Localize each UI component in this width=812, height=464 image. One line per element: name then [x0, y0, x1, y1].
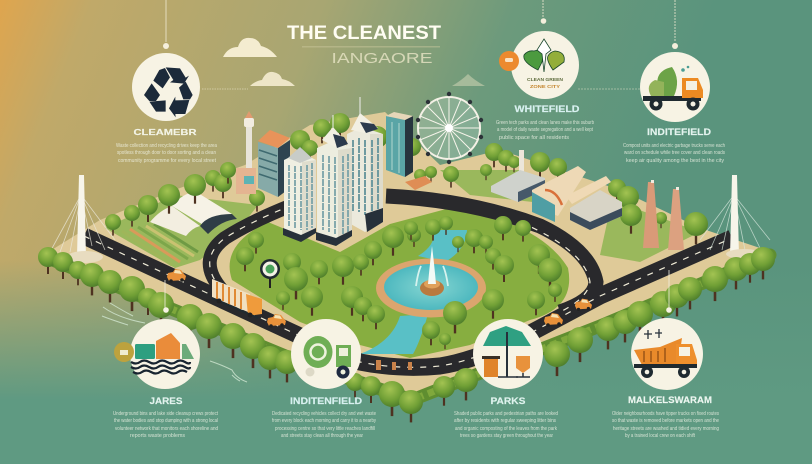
description: by a trained local crew on each shift — [625, 433, 696, 439]
description: spotless through door to door sorting and a clean — [117, 150, 216, 156]
tower B — [316, 115, 352, 246]
icon: leaf truck — [643, 66, 703, 110]
lawn trees — [236, 216, 562, 349]
badge caption: CLEAN GREEN — [527, 77, 563, 82]
description: the water bodies and stop dumping with a strong local — [114, 418, 218, 424]
panel: inditenfield badge — [272, 319, 376, 439]
title — [287, 22, 441, 67]
panel: indite field truck badge — [623, 52, 725, 164]
ferris wheel — [416, 92, 483, 164]
title: IANGAORE — [332, 50, 432, 67]
island ground — [42, 112, 772, 400]
heading: malkelswaram: MALKELSWARAM — [628, 395, 712, 405]
icon: green recycling truck — [304, 336, 351, 378]
clouds — [223, 38, 485, 86]
description: Waste collection and recycling drives keep the area — [116, 143, 217, 149]
warehouse domes — [150, 193, 237, 236]
description: a model of daily waste segregation and a well kept — [497, 127, 594, 133]
description — [113, 411, 219, 439]
bridge pylon left — [50, 175, 115, 263]
truck — [212, 279, 262, 318]
water wave marks — [102, 303, 247, 382]
description: ward on schedule while tree cover and clean roads — [624, 150, 725, 156]
city island — [38, 92, 775, 422]
fountain pool — [376, 246, 486, 318]
heading: inditenfield: INDITENFIELD — [290, 396, 363, 406]
orange-roofed office block — [258, 130, 290, 197]
panel: whitefield badge: ZONE CITY — [530, 84, 560, 89]
panel: parks badge — [454, 319, 558, 439]
planted patches — [105, 170, 700, 268]
icon: recycle arrows — [144, 67, 193, 117]
description: Older neighbourhoods have tipper trucks on fixed routes — [612, 411, 719, 417]
industrial buildings — [491, 150, 622, 230]
description: Dedicated recycling vehicles collect dry and wet waste — [272, 411, 376, 417]
farm plots — [122, 224, 198, 265]
heading: inditefield: INDITEFIELD — [647, 127, 712, 137]
trees behind buildings — [105, 113, 708, 244]
description: Compost units and electric garbage trucks serve each — [623, 143, 725, 149]
river — [360, 230, 467, 354]
roads — [84, 196, 732, 367]
icon: olive tag — [114, 342, 134, 362]
description: after by residents with regular sweeping litter bins — [454, 418, 556, 424]
description: trees so gardens stay green throughout the year — [460, 433, 553, 439]
icon: waste bins over waves — [131, 333, 194, 374]
icon: orange dump truck — [634, 329, 697, 378]
vehicles on road — [167, 269, 592, 370]
lawn — [230, 208, 569, 358]
panel: whitefield badge — [496, 31, 594, 141]
description: processing centre so that very little reaches landfill — [275, 426, 375, 432]
description: so that waste is removed before markets open and the — [612, 418, 719, 424]
description: public space for all residents — [499, 135, 570, 141]
description — [623, 143, 725, 164]
heading: parks: PARKS — [490, 396, 526, 406]
observation tower — [236, 111, 256, 194]
chimneys — [643, 180, 684, 250]
description — [496, 120, 594, 141]
description: heritage streets are washed and tidied every morning — [613, 426, 719, 432]
bridge pylon right — [700, 175, 770, 259]
glass tower back — [386, 112, 413, 177]
connector dot — [164, 280, 166, 310]
description: from every block each morning and carry it to a nearby — [272, 418, 376, 424]
heading: cleameber: CLEAMEBR — [134, 127, 196, 137]
tower A — [283, 147, 316, 242]
panel: malkelswaram badge — [612, 270, 719, 439]
description — [454, 411, 558, 439]
hedge along shore — [48, 255, 770, 400]
description: keep air quality among the best in the city — [626, 158, 725, 164]
panel: recycling badge — [116, 53, 217, 164]
hanging connectors — [163, 0, 678, 89]
title: THE CLEANEST — [287, 22, 441, 44]
edge trees — [38, 247, 775, 422]
icon: orange tag — [499, 51, 519, 71]
tower C — [347, 97, 383, 232]
panel: jars badge — [113, 280, 219, 439]
description: reports waste problems — [130, 433, 186, 439]
description: Underground bins and lake side cleanup crews protect — [113, 411, 219, 417]
description: volunteer network that monitors each shoreline and — [115, 426, 218, 432]
description — [272, 411, 376, 439]
description: and organic composting of the leaves from the park — [455, 426, 557, 432]
icon: umbrella and bin — [482, 326, 531, 377]
heading: jares: JARES — [150, 396, 182, 406]
description: Shaded public parks and pedestrian paths are looked — [454, 411, 558, 417]
heading: whitefield: WHITEFIELD — [514, 104, 580, 114]
map pin — [260, 259, 280, 288]
small terracotta pavilion — [405, 176, 432, 190]
description: Green tech parks and clean lanes make this suburb — [496, 120, 594, 126]
icon: green leaves — [524, 39, 564, 72]
road markings — [84, 206, 732, 367]
description: community programme for every local street — [118, 158, 217, 164]
description: and streets stay clean all through the year — [281, 433, 363, 439]
white towers — [283, 97, 383, 246]
description — [612, 411, 719, 439]
description — [116, 143, 217, 164]
